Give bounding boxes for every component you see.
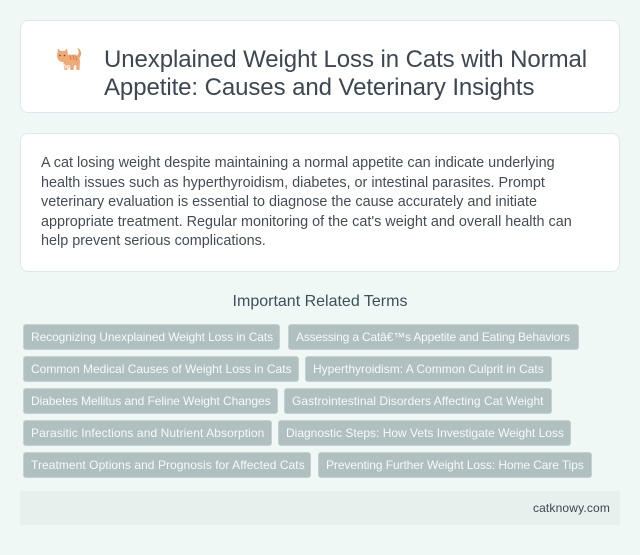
tag (305, 356, 552, 382)
description text: help prevent serious complications. (41, 233, 266, 249)
icon: cat (57, 48, 81, 70)
footer source: catknowy.com (533, 501, 610, 515)
title text: Unexplained Weight Loss in Cats with Normal (104, 46, 587, 73)
panel: term tags (23, 324, 592, 478)
tag: Assessing a Catâ€™s Appetite and Eating Behaviors (296, 330, 570, 344)
description text: health issues such as hyperthyroidism, diabetes, or intestinal parasites. Prompt (41, 175, 545, 191)
description text: veterinary evaluation is essential to diagnose the cause accurately and initiate (41, 194, 537, 210)
description text: A cat losing weight despite maintaining a normal appetite can indicate underlying (41, 155, 555, 171)
tag: Preventing Further Weight Loss: Home Care Tips (326, 458, 584, 472)
tag: Diabetes Mellitus and Feline Weight Changes (31, 394, 271, 408)
panel: title card (20, 20, 620, 113)
description text (41, 155, 572, 249)
tag (284, 388, 552, 414)
tag: Diagnostic Steps: How Vets Investigate Weight Loss (286, 426, 564, 440)
tag (23, 420, 272, 446)
title text (104, 46, 587, 101)
tag (23, 388, 278, 414)
tag (288, 324, 579, 350)
tag: Common Medical Causes of Weight Loss in Cats (31, 362, 292, 376)
tag: Treatment Options and Prognosis for Affected Cats (31, 458, 305, 472)
tag (278, 420, 571, 446)
description text: appropriate treatment. Regular monitoring of the cat's weight and overall health can (41, 214, 572, 230)
tag (23, 324, 280, 350)
panel: description (20, 133, 620, 272)
tag: Recognizing Unexplained Weight Loss in Cats (31, 330, 273, 344)
heading: related terms: Important Related Terms (233, 293, 407, 310)
footer (20, 491, 620, 525)
tag (23, 452, 311, 478)
tag: Parasitic Infections and Nutrient Absorption (31, 426, 264, 440)
title text: Appetite: Causes and Veterinary Insights (104, 74, 534, 101)
tag (23, 356, 299, 382)
tag (318, 452, 592, 478)
tag: Hyperthyroidism: A Common Culprit in Cats (313, 362, 544, 376)
tag: Gastrointestinal Disorders Affecting Cat Weight (292, 394, 544, 408)
